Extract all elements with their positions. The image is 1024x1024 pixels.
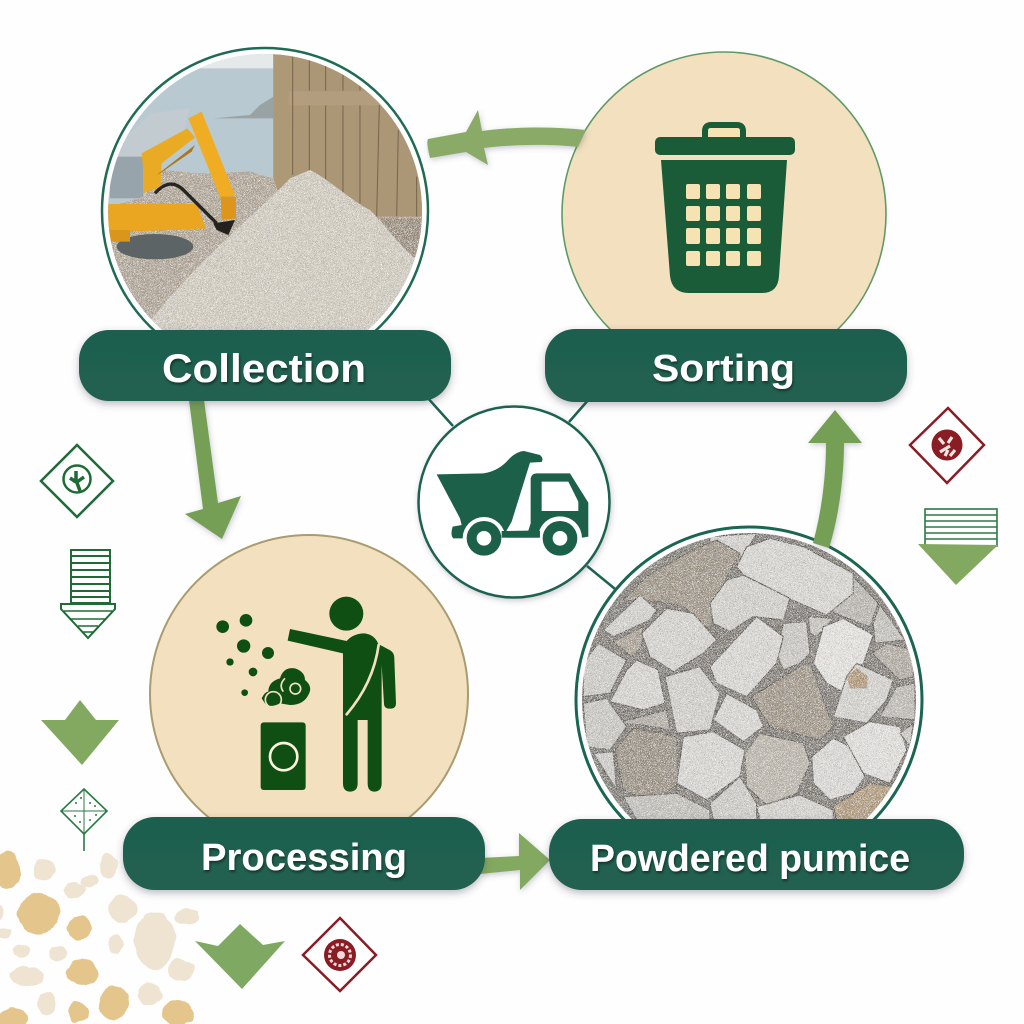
icon: person dropping waste into bin	[216, 597, 396, 792]
label text: Collection: Collection	[162, 347, 366, 391]
icon: trash bin	[655, 125, 795, 293]
panel: centre truck hub	[418, 406, 610, 598]
label text: Processing: Processing	[201, 837, 407, 879]
icon: green diamond badge	[41, 445, 113, 517]
icon: solid green bottom down arrow	[195, 924, 285, 989]
pill: powdered pumice label	[549, 819, 964, 890]
arrow: processing to powdered pumice	[480, 833, 550, 890]
icon: striped down arrow with solid head	[918, 509, 998, 585]
icon: small dotted diamond	[61, 789, 107, 851]
icon: striped outline down arrow	[61, 550, 115, 638]
decoration: pumice powder scatter	[0, 851, 199, 1024]
arrow: collection to processing	[185, 400, 241, 539]
label text: Powdered pumice: Powdered pumice	[590, 838, 910, 880]
photo: pumice rocks	[582, 533, 916, 819]
pill: collection label	[79, 330, 451, 401]
arrow: sorting to collection	[427, 110, 586, 165]
connector lines to centre hub	[426, 396, 620, 593]
icon: red diamond badge right	[910, 408, 984, 483]
photo: excavator and pumice pile	[100, 50, 430, 340]
pill: sorting label	[545, 329, 907, 402]
icon: red diamond badge bottom	[303, 918, 376, 991]
icon: dump truck	[437, 451, 588, 560]
label text: Sorting: Sorting	[652, 348, 795, 390]
arrow: powdered pumice to sorting	[808, 410, 862, 548]
icon: solid green down arrow	[41, 700, 119, 765]
panel: powdered pumice photo circle	[574, 526, 924, 819]
panel: sorting circle	[562, 52, 886, 376]
panel: collection photo circle	[100, 46, 430, 330]
pill: processing label	[123, 817, 485, 890]
panel: processing circle	[150, 535, 468, 853]
